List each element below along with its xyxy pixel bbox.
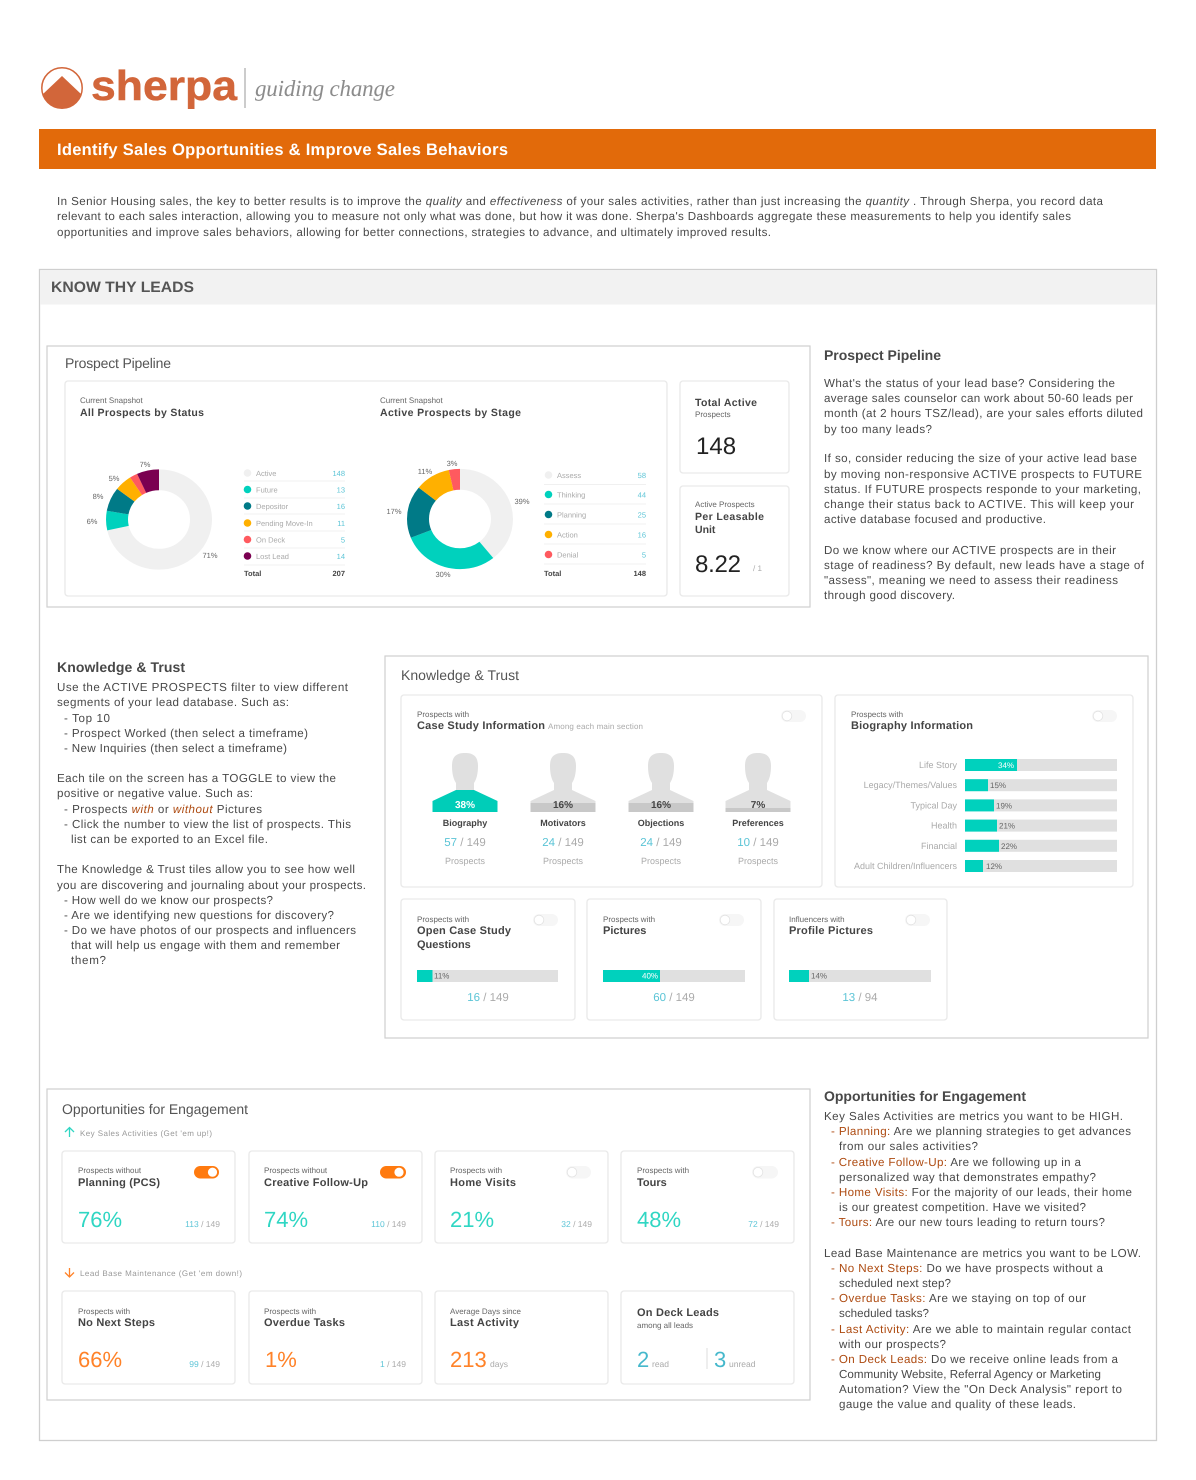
text block: knowledge and trust — [57, 659, 366, 967]
legend: stage: Assess — [557, 471, 581, 480]
text block: knowledge and trust: - How well do we know our prospects? — [64, 894, 274, 907]
card: case study information: Among each main section — [548, 722, 643, 731]
legend: status: On Deck — [256, 536, 285, 544]
donut chart: active prospects by stage: 17% — [386, 507, 402, 516]
text block: knowledge and trust: - Prospect Worked (then select a timeframe) — [64, 727, 308, 740]
text block: opportunities for engagement: Lead Base Maintenance are metrics you want to be LOW. — [824, 1247, 1141, 1260]
person: motivators 16%: 16% — [553, 800, 573, 811]
text block: opportunities for engagement: gauge the value and quality of these leads. — [839, 1398, 1076, 1411]
icon: down arrow — [65, 1268, 74, 1277]
donut chart: active prospects by stage: 39% — [514, 497, 530, 506]
person: motivators 16% — [530, 753, 596, 866]
bar chart: biography: 34% — [998, 761, 1014, 770]
person: preferences 7% — [726, 753, 790, 866]
card: influencers with profile pictures — [774, 899, 947, 1020]
text block: knowledge and trust: them? — [71, 954, 107, 967]
legend: stage: 44 — [638, 490, 646, 500]
person: biography 38% — [432, 753, 498, 866]
tile: no next steps: Prospects with — [78, 1307, 130, 1316]
text block: prospect pipeline: by moving non-responsive ACTIVE prospects to FUTURE — [824, 468, 1142, 481]
legend: stage: 25 — [638, 510, 646, 520]
legend: status: Depositor — [256, 502, 289, 511]
tile: on deck leads: among all leads — [637, 1321, 693, 1330]
card: active prospects per leasable unit: Per Leasable — [695, 511, 764, 523]
legend: status: Future — [256, 486, 278, 494]
tile: creative follow-up — [249, 1151, 422, 1243]
card: influencers with profile pictures: 14% — [811, 972, 827, 980]
legend: status — [244, 469, 345, 578]
text block: knowledge and trust: - Are we identifying new questions for discovery? — [64, 909, 335, 922]
text block: opportunities for engagement: - On Deck Leads: Do we receive online leads from a — [831, 1353, 1119, 1366]
person: motivators 16%: 24 / 149 — [542, 837, 584, 849]
tile: planning: Planning (PCS) — [78, 1177, 160, 1189]
text block: opportunities for engagement: personalized way that demonstrates empathy? — [839, 1171, 1097, 1184]
card: influencers with profile pictures: 13 / 94 — [842, 992, 878, 1004]
person: motivators 16%: Motivators — [540, 818, 586, 828]
tile: overdue tasks: Prospects with — [264, 1307, 316, 1316]
tile: no next steps — [62, 1291, 235, 1384]
intro paragraph: In Senior Housing sales, the key to better results is to improve the quality and effectiveness of your sales activities, rather than just increasing the quantity . Through Sherpa, you record data — [57, 195, 1104, 208]
section heading: KNOW THY LEADS — [51, 279, 194, 296]
text block: opportunities for engagement — [824, 1088, 1141, 1411]
person: motivators 16%: Prospects — [543, 856, 584, 866]
tile: home visits: 32 / 149 — [561, 1219, 592, 1229]
intro paragraph: opportunities and improve sales behaviors, allowing for better connections, strategies to advance, and ultimately improved results. — [57, 226, 771, 239]
panel title: Knowledge & Trust — [401, 667, 519, 683]
bar chart: biography: Typical Day — [910, 800, 957, 810]
section: know thy leads — [40, 270, 1156, 1440]
text block: prospect pipeline — [824, 347, 1145, 602]
donut chart: active prospects by stage: 3% — [447, 459, 458, 468]
text block: prospect pipeline: average sales counselor can work about 50-60 leads per — [824, 392, 1133, 405]
text block: prospect pipeline: stage of readiness? By default, new leads have a stage of — [824, 559, 1145, 572]
donut chart: active prospects by stage: 30% — [435, 570, 451, 579]
intro paragraph: relevant to each sales interaction, allowing you to measure not only what was done, but how it was done. Sherpa's Dashboards aggregate these measurements to help you identify sales — [57, 210, 1071, 223]
card: active prospects per leasable unit: Active Prospects — [695, 500, 755, 509]
card: total active prospects: Prospects — [695, 410, 731, 419]
bar chart: biography: 12% — [986, 862, 1002, 871]
chart heading: all prospects by status: Current Snapshot — [80, 396, 143, 405]
text block: opportunities for engagement: Automation? View the "On Deck Analysis" report to — [839, 1383, 1122, 1396]
text block: knowledge and trust: Use the ACTIVE PROSPECTS filter to view different — [57, 681, 349, 694]
tile: tours — [621, 1151, 794, 1243]
tile: planning: 76% — [78, 1207, 122, 1232]
intro paragraph — [57, 195, 1104, 239]
tile: last activity — [435, 1291, 608, 1384]
person: objections 16%: Objections — [638, 818, 684, 828]
legend: stage: Planning — [557, 510, 586, 520]
card: total active prospects: 148 — [696, 433, 736, 460]
card: case study information: Case Study Information — [417, 720, 545, 732]
tile: last activity: Last Activity — [450, 1317, 520, 1329]
tile: on deck leads: unread — [729, 1359, 756, 1369]
legend: stage — [544, 471, 646, 578]
text block: knowledge and trust: - New Inquiries (then select a timeframe) — [64, 742, 287, 755]
chart heading: active prospects by stage: Active Prospects by Stage — [380, 407, 521, 419]
text block: opportunities for engagement: - Overdue Tasks: Are we staying on top of our — [831, 1292, 1086, 1305]
tile: overdue tasks: 1 / 149 — [380, 1359, 406, 1369]
chart heading: active prospects by stage: Current Snapshot — [380, 396, 443, 405]
legend: stage: 58 — [638, 471, 646, 480]
person: objections 16%: 16% — [651, 800, 671, 811]
tile: on deck leads — [621, 1291, 794, 1384]
tile: creative follow-up: 74% — [264, 1207, 308, 1232]
text block: opportunities for engagement: - Home Visits: For the majority of our leads, their home — [831, 1186, 1132, 1199]
card: influencers with profile pictures: Profile Pictures — [789, 925, 873, 937]
donut chart: all prospects by status — [87, 460, 218, 560]
card: active prospects per leasable unit: Unit — [695, 524, 716, 536]
person: biography 38%: Prospects — [445, 856, 486, 866]
card: active prospects per leasable unit: 8.22 — [695, 551, 741, 578]
bar chart: biography: Health — [931, 821, 957, 831]
card: case study information — [401, 695, 822, 887]
legend: status: 11 — [337, 519, 345, 528]
bar chart: biography: 22% — [1001, 842, 1017, 851]
text block: knowledge and trust: - Click the number to view the list of prospects. This — [64, 818, 351, 831]
tile: tours: Tours — [637, 1177, 667, 1189]
card: status and stage charts — [65, 381, 667, 596]
donut chart: active prospects by stage — [386, 459, 530, 579]
card: pictures: 40% — [642, 972, 658, 980]
panel: prospect pipeline — [47, 346, 810, 607]
legend: stage: 148 — [633, 569, 646, 578]
toggle off — [1092, 710, 1117, 722]
legend: status: 16 — [337, 502, 345, 511]
text block: knowledge and trust: Each tile on the screen has a TOGGLE to view the — [57, 772, 336, 785]
bar chart: biography: Legacy/Themes/Values — [864, 780, 957, 790]
card: pictures: Prospects with — [603, 915, 655, 924]
card: active prospects per leasable unit: / 1 — [753, 564, 762, 573]
text block: prospect pipeline: Prospect Pipeline — [824, 347, 941, 363]
text block: knowledge and trust: The Knowledge & Trust tiles allow you to see how well — [57, 863, 355, 876]
person: preferences 7%: Prospects — [738, 856, 779, 866]
legend: stage: 5 — [642, 550, 646, 560]
title banner — [39, 129, 1156, 169]
logo: sherpa guiding change: sherpa — [91, 62, 238, 109]
tile: on deck leads: On Deck Leads — [637, 1307, 719, 1319]
tile: tours: 72 / 149 — [748, 1219, 779, 1229]
subheading: lead base maintenance: Lead Base Maintenance (Get 'em down!) — [80, 1269, 242, 1278]
card: open case study questions: 11% — [434, 972, 449, 980]
title banner: Identify Sales Opportunities & Improve Sales Behaviors — [57, 141, 508, 159]
tile: last activity: 213 — [450, 1347, 487, 1372]
legend: status: Pending Move-In — [256, 519, 313, 528]
text block: knowledge and trust: - Top 10 — [64, 712, 110, 725]
text block: knowledge and trust: that will help us engage with them and remember — [71, 939, 340, 952]
text block: opportunities for engagement: - No Next Steps: Do we have prospects without a — [831, 1262, 1104, 1275]
tile: no next steps: No Next Steps — [78, 1317, 155, 1329]
legend: status: 207 — [332, 569, 345, 578]
legend: status: 148 — [332, 469, 345, 478]
tile: home visits — [435, 1151, 608, 1243]
card: case study information: Prospects with — [417, 710, 469, 719]
card: open case study questions: 16 / 149 — [467, 992, 509, 1004]
text block: opportunities for engagement: with our prospects? — [838, 1338, 947, 1351]
donut chart: active prospects by stage: 11% — [418, 467, 433, 476]
bar chart: biography — [854, 759, 1117, 872]
tile: planning — [62, 1151, 235, 1243]
text block: knowledge and trust: - Prospects with or without Pictures — [64, 803, 262, 816]
tile: overdue tasks: 1% — [265, 1347, 297, 1372]
bar chart: biography: Adult Children/Influencers — [854, 861, 957, 871]
card: open case study questions — [401, 899, 575, 1020]
legend: stage: Denial — [557, 550, 579, 560]
tile: last activity: days — [490, 1359, 508, 1369]
tile: on deck leads: 3 — [714, 1347, 726, 1372]
person: preferences 7%: 7% — [751, 800, 765, 811]
tile: last activity: Average Days since — [450, 1307, 522, 1316]
text block: knowledge and trust: positive or negative value. Such as: — [57, 787, 253, 800]
donut chart: all prospects by status: 6% — [87, 517, 98, 526]
tile: planning: Prospects without — [78, 1166, 142, 1175]
legend: status: 13 — [337, 486, 345, 494]
legend: stage: Thinking — [557, 490, 585, 500]
tile: on deck leads: 2 — [637, 1347, 649, 1372]
legend: stage: Action — [557, 530, 578, 540]
donut chart: all prospects by status: 71% — [202, 551, 218, 560]
person: biography 38%: 57 / 149 — [444, 837, 486, 849]
legend: status: Active — [256, 469, 276, 478]
text block: knowledge and trust: Knowledge & Trust — [57, 659, 185, 675]
tile: creative follow-up: 110 / 149 — [371, 1219, 406, 1229]
text block: prospect pipeline: What's the status of your lead base? Considering the — [824, 377, 1115, 390]
text block: prospect pipeline: status. If FUTURE prospects responde to your marketing, — [824, 483, 1141, 496]
icon: up arrow — [65, 1128, 74, 1137]
chart heading: all prospects by status: All Prospects by Status — [80, 407, 204, 419]
text block: prospect pipeline: active database focused and productive. — [824, 513, 1046, 526]
panel: opportunities for engagement — [47, 1089, 810, 1400]
card: active prospects per leasable unit — [680, 486, 789, 596]
person: biography 38%: Biography — [443, 818, 487, 828]
donut chart: all prospects by status: 8% — [93, 492, 104, 501]
tile: home visits: 21% — [450, 1207, 494, 1232]
tile: overdue tasks — [249, 1291, 422, 1384]
logo: sherpa guiding change — [42, 62, 395, 109]
legend: stage: 16 — [638, 530, 646, 540]
text block: opportunities for engagement: - Creative Follow-Up: Are we following up in a — [831, 1156, 1082, 1169]
bar chart: biography: 21% — [999, 822, 1015, 831]
text block: opportunities for engagement: - Planning: Are we planning strategies to get advances — [831, 1125, 1131, 1138]
bar chart: biography: Financial — [921, 841, 957, 851]
card: pictures: Pictures — [603, 925, 646, 937]
card: influencers with profile pictures: Influencers with — [789, 915, 845, 924]
text block: prospect pipeline: through good discovery. — [824, 589, 955, 602]
card: open case study questions: Questions — [417, 939, 471, 951]
text block: prospect pipeline: change their status back to ACTIVE. This will keep your — [824, 498, 1134, 511]
text block: knowledge and trust: list can be exported to an Excel file. — [71, 833, 268, 846]
person: objections 16%: Prospects — [641, 856, 682, 866]
card: open case study questions: Prospects with — [417, 915, 469, 924]
logo: sherpa guiding change: guiding change — [255, 76, 395, 101]
panel title: Opportunities for Engagement — [62, 1101, 248, 1117]
tile: home visits: Prospects with — [450, 1166, 502, 1175]
card: total active prospects: Total Active — [695, 397, 757, 409]
tile: creative follow-up: Prospects without — [264, 1166, 328, 1175]
tile: overdue tasks: Overdue Tasks — [264, 1317, 345, 1329]
donut chart: all prospects by status: 7% — [140, 460, 151, 469]
text block: knowledge and trust: segments of your lead database. Such as: — [57, 696, 289, 709]
panel: knowledge and trust — [385, 656, 1148, 1038]
text block: opportunities for engagement: - Tours: Are our new tours leading to return tours? — [831, 1216, 1106, 1229]
bar chart: biography: Life Story — [919, 760, 957, 770]
text block: opportunities for engagement: Key Sales Activities are metrics you want to be HIGH. — [824, 1110, 1123, 1123]
legend: stage: Total — [544, 569, 561, 578]
card: biography information — [835, 695, 1133, 887]
card: total active prospects — [680, 381, 789, 473]
tile: home visits: Home Visits — [450, 1177, 516, 1189]
card: biography information: Biography Information — [851, 720, 973, 732]
card: biography information: Prospects with — [851, 710, 903, 719]
card: pictures: 60 / 149 — [653, 992, 695, 1004]
tile: tours: Prospects with — [637, 1166, 689, 1175]
person: preferences 7%: 10 / 149 — [737, 837, 779, 849]
text block: opportunities for engagement: from our sales activities? — [839, 1140, 979, 1153]
text block: prospect pipeline: by too many leads? — [824, 423, 933, 436]
text block: opportunities for engagement: - Last Activity: Are we able to maintain regular contact — [831, 1323, 1132, 1336]
card: open case study questions: Open Case Study — [417, 925, 512, 937]
toggle off — [781, 710, 806, 722]
legend: status: Total — [244, 569, 261, 578]
text block: prospect pipeline: If so, consider reducing the size of your active lead base — [824, 452, 1137, 465]
text block: opportunities for engagement: Opportunities for Engagement — [824, 1088, 1026, 1104]
tile: on deck leads: read — [652, 1359, 669, 1369]
bar chart: biography: 19% — [996, 801, 1012, 810]
tile: planning: 113 / 149 — [185, 1219, 220, 1229]
legend: status: 5 — [341, 536, 345, 544]
text block: opportunities for engagement: is our greatest competition. Have we visited? — [839, 1201, 1087, 1214]
bar chart: biography: 15% — [990, 781, 1006, 790]
text block: opportunities for engagement: scheduled tasks? — [839, 1307, 930, 1320]
person: objections 16% — [628, 753, 694, 866]
person: objections 16%: 24 / 149 — [640, 837, 682, 849]
text block: opportunities for engagement: Community Website, Referral Agency or Marketing — [839, 1368, 1101, 1381]
tile: no next steps: 66% — [78, 1347, 122, 1372]
text block: knowledge and trust: you are discovering and journaling about your prospects. — [57, 879, 366, 892]
chart heading: active prospects by stage — [380, 396, 521, 419]
text block: opportunities for engagement: scheduled next step? — [839, 1277, 952, 1290]
legend: status: 14 — [337, 552, 345, 561]
legend: status: Lost Lead — [256, 552, 289, 561]
text block: prospect pipeline: "assess", meaning we need to assess their readiness — [824, 574, 1118, 587]
person: biography 38%: 38% — [455, 800, 475, 811]
chart heading: all prospects by status — [80, 396, 204, 419]
card: pictures — [587, 899, 761, 1020]
person: preferences 7%: Preferences — [732, 818, 784, 828]
subheading: key sales activities: Key Sales Activities (Get 'em up!) — [80, 1129, 212, 1138]
tile: no next steps: 99 / 149 — [189, 1359, 220, 1369]
text block: prospect pipeline: month (at 2 hours TSZ/lead), are your sales efforts diluted — [824, 407, 1143, 420]
text block: prospect pipeline: Do we know where our ACTIVE prospects are in their — [824, 544, 1116, 557]
donut chart: all prospects by status: 5% — [109, 474, 120, 483]
tile: creative follow-up: Creative Follow-Up — [264, 1177, 368, 1189]
text block: knowledge and trust: - Do we have photos of our prospects and influencers — [64, 924, 356, 937]
tile: tours: 48% — [637, 1207, 681, 1232]
panel title: Prospect Pipeline — [65, 355, 171, 371]
